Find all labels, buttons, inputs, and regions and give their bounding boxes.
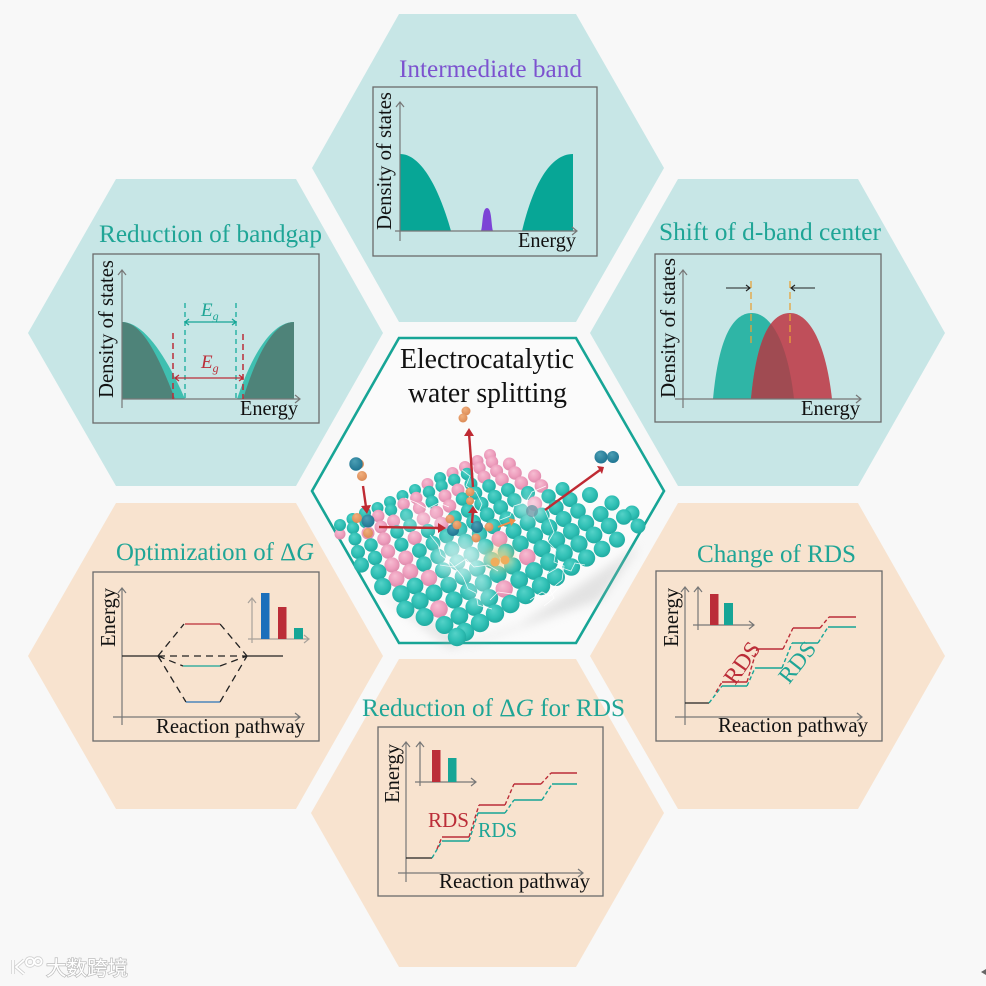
chart: energy steps with reduced RDS barrier: Energy	[380, 744, 404, 803]
chart: bandgap density of states: g	[213, 309, 219, 323]
chart: free energy profile with bar inset: Energy	[96, 588, 120, 647]
heading: intermediate band: Intermediate band	[399, 56, 582, 83]
heading: electrocatalytic water splitting: water splitting	[408, 378, 567, 409]
heading: electrocatalytic water splitting: Electrocatalytic	[400, 344, 574, 375]
heading: shift of d-band center: Shift of d-band center	[659, 219, 882, 246]
chart: d-band center shift	[655, 254, 881, 422]
small corner marker	[981, 969, 986, 975]
arrow: oxygen release	[464, 428, 474, 487]
arrow: short upward step	[468, 506, 478, 523]
icon: intermediate molecule two	[471, 521, 494, 542]
chart: energy steps with changed RDS: Reaction pathway	[718, 713, 868, 737]
panel: electrocatalytic water splitting	[312, 338, 664, 648]
icon: hydrogen molecule	[594, 450, 619, 464]
icon: oxygen molecule	[458, 406, 470, 422]
icon: incoming water molecule	[349, 457, 367, 481]
chart: bandgap density of states	[93, 254, 319, 423]
chart: intermediate band density of states	[372, 87, 597, 256]
chart: d-band center shift: Density of states	[656, 258, 680, 398]
chart: energy steps with changed RDS: Energy	[659, 588, 683, 647]
illustration: catalyst atom sheet	[334, 449, 646, 648]
panel: change of RDS	[590, 503, 945, 809]
arrow: orange migration	[498, 518, 516, 527]
icon: adsorbed oxygen pair	[466, 488, 474, 505]
chart: bandgap density of states: Density of states	[94, 260, 118, 398]
chart: d-band center shift: Energy	[801, 396, 860, 420]
chart: bandgap density of states: Energy	[240, 396, 298, 420]
icon: hydrogen intermediate	[526, 505, 538, 517]
chart: energy steps with reduced RDS barrier	[378, 727, 603, 896]
panel: intermediate band	[312, 14, 664, 322]
watermark logo	[13, 957, 128, 980]
bar chart inset	[415, 742, 476, 786]
arrow: hydrogen release	[545, 466, 604, 510]
heading: change of RDS: Change of RDS	[697, 541, 856, 568]
panel: reduction of delta G for RDS	[311, 659, 664, 967]
bar chart inset	[693, 587, 754, 630]
chart: energy steps with changed RDS: RDS	[719, 637, 765, 689]
chart: intermediate band density of states: Energy	[518, 228, 576, 252]
chart: energy steps with reduced RDS barrier: RDS	[478, 818, 517, 842]
icon: orange atoms on surface	[490, 556, 510, 566]
heading: optimization of delta G: Optimization of ΔG	[116, 539, 314, 566]
watermark logo: 大数跨境	[46, 957, 128, 980]
panel: shift of d-band center	[590, 179, 945, 486]
chart: energy steps with reduced RDS barrier: RDS	[428, 808, 469, 832]
heading: reduction of bandgap: Reduction of bandgap	[99, 221, 322, 248]
chart: free energy profile with bar inset	[93, 572, 319, 741]
icon: intermediate molecule one	[446, 514, 462, 536]
heading: electrocatalytic water splitting	[400, 344, 574, 409]
chart: energy steps with reduced RDS barrier: Reaction pathway	[439, 869, 590, 893]
arrow: water adsorption	[361, 486, 371, 514]
chart: bandgap density of states: g	[213, 361, 219, 375]
chart: energy steps with changed RDS: RDS	[773, 636, 821, 688]
chart: bandgap density of states: E	[201, 300, 213, 321]
arrow: surface migration	[379, 523, 446, 533]
chart: energy steps with changed RDS	[656, 571, 882, 741]
icon: adsorbed water molecule	[352, 513, 374, 538]
chart: bandgap density of states: E	[201, 352, 213, 373]
chart: free energy profile with bar inset: Reaction pathway	[156, 714, 305, 738]
panel: optimization of delta G	[28, 503, 383, 809]
heading: reduction of delta G for RDS: Reduction of ΔG for RDS	[362, 695, 625, 722]
panel: reduction of bandgap	[28, 179, 383, 486]
bar chart inset	[248, 593, 309, 643]
chart: intermediate band density of states: Density of states	[372, 92, 396, 230]
